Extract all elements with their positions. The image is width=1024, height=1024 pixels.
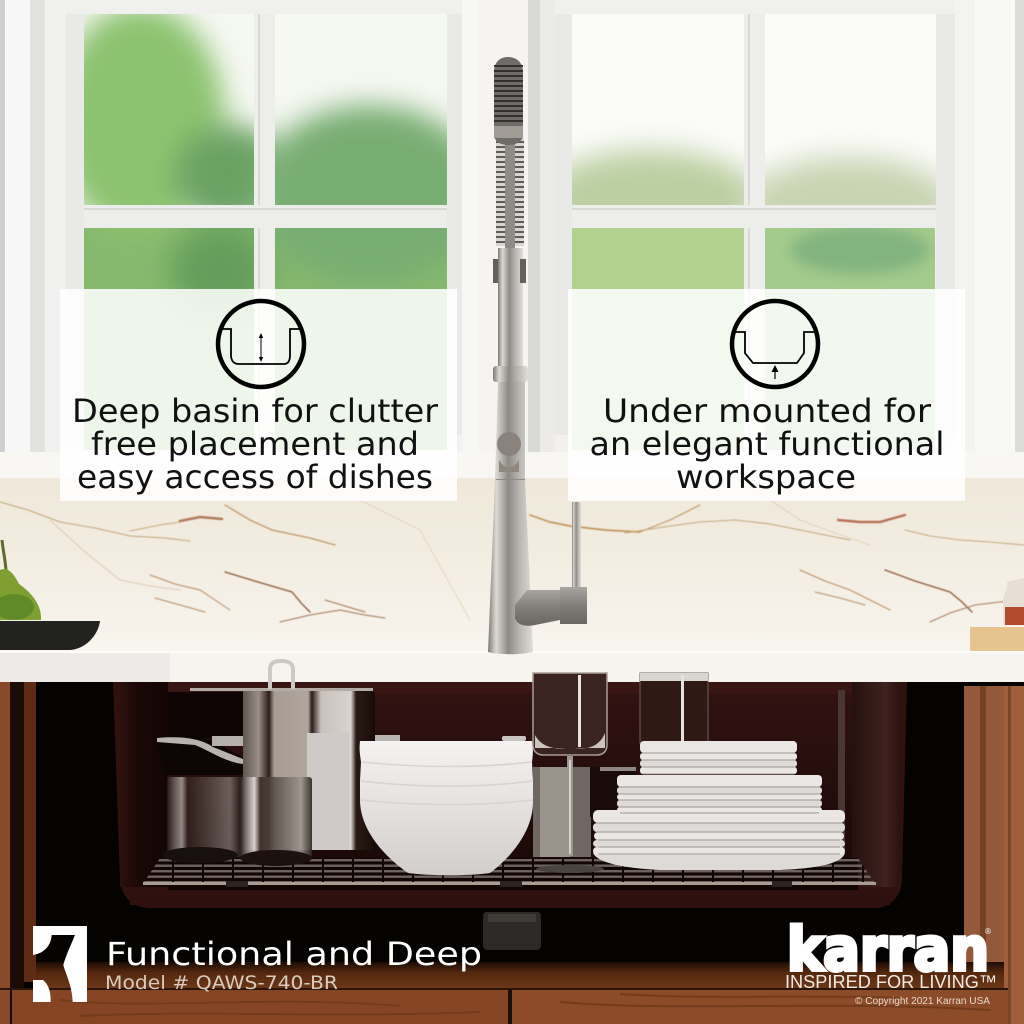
panel text: free placement and <box>91 425 419 463</box>
under-mount brown sink basin <box>113 682 907 908</box>
lever knob <box>497 432 521 456</box>
karran brand block: ® <box>984 927 992 936</box>
drain below the sink <box>483 912 541 950</box>
marble backsplash <box>0 478 1024 654</box>
oil jar on wooden board <box>970 578 1024 651</box>
panel text <box>72 392 439 496</box>
karran brand block: INSPIRED FOR LIVING™ <box>785 971 997 992</box>
stack of white bowls <box>360 735 533 875</box>
second pot behind bowls <box>533 767 636 857</box>
cabinet and wood surround <box>0 682 1024 1024</box>
karran brand block: karran <box>787 915 989 985</box>
stack of white plates <box>593 741 845 870</box>
faucet body <box>488 382 533 654</box>
window sill <box>0 452 1024 479</box>
window wall background <box>0 0 1024 480</box>
spray head <box>494 57 523 145</box>
spout <box>515 590 587 626</box>
tall water glass <box>640 673 708 743</box>
right window panes with garden view <box>572 14 936 450</box>
panel text <box>590 392 944 496</box>
karran brand block: © Copyright 2021 Karran USA <box>855 996 990 1007</box>
title: Functional and Deep <box>106 935 482 973</box>
drinking glasses <box>162 777 312 866</box>
karran emblem logo <box>33 926 87 1002</box>
dish rack grid <box>142 858 876 887</box>
pull-down faucet <box>488 57 587 654</box>
faucet spring <box>496 136 524 248</box>
panel text: easy access of dishes <box>77 458 433 496</box>
collar <box>493 366 528 382</box>
model number: Model # QAWS-740-BR <box>105 972 338 994</box>
panel: under mounted <box>568 289 965 501</box>
panel text: workspace <box>676 458 856 496</box>
lever rod <box>572 502 581 588</box>
left window panes with garden view <box>84 14 447 450</box>
icon: basin depth <box>218 301 304 387</box>
wine glass <box>533 673 607 873</box>
icon: under mount basin <box>732 301 818 387</box>
pitcher <box>157 736 243 775</box>
countertop edge <box>0 651 1024 682</box>
window muntins <box>66 0 955 435</box>
panel: deep basin <box>60 289 457 501</box>
stainless stock pot <box>190 661 373 850</box>
panel text: an elegant functional <box>590 425 944 463</box>
panel text: Deep basin for clutter <box>72 392 439 430</box>
pear on dark bowl <box>0 540 100 650</box>
panel text: Under mounted for <box>603 392 932 430</box>
